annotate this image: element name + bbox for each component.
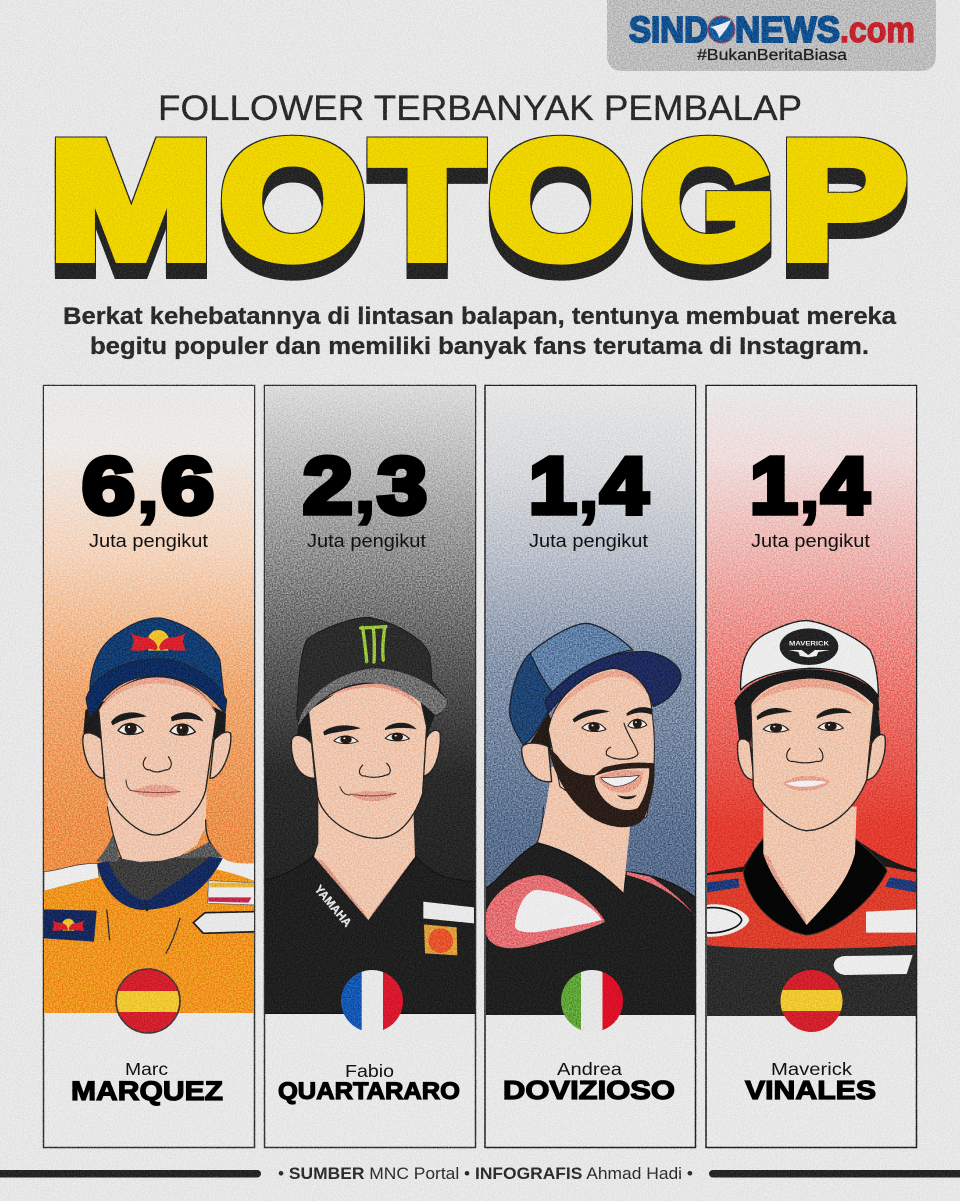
rider name: MARQUEZ <box>71 1076 223 1106</box>
portrait: Marc Marquez <box>44 618 257 1013</box>
flag: Spain <box>116 969 180 1033</box>
follower count: 2,3 <box>303 441 427 530</box>
gradient backdrop <box>707 386 916 1016</box>
portrait: Maverick Vinales: MAVERICK <box>789 641 829 648</box>
rider name <box>503 1059 675 1105</box>
rider name: DOVIZIOSO <box>503 1077 675 1105</box>
title: MOTOGP: P <box>781 108 906 293</box>
follower count: 6,6 <box>82 441 214 530</box>
footer rule right <box>709 1170 960 1178</box>
subtitle heading: FOLLOWER TERBANYAK PEMBALAP <box>158 88 802 128</box>
footer credits: • SUMBER MNC Portal • INFOGRAFIS Ahmad Hadi • <box>278 1165 693 1183</box>
panel: Maverick Vinales <box>706 386 917 1148</box>
portrait: Fabio Quartararo: YAMAHA <box>312 882 355 930</box>
title: MOTOGP: O <box>489 108 633 293</box>
intro paragraph: Berkat kehebatannya di lintasan balapan, tentunya membuat mereka <box>63 303 897 330</box>
rider name: VINALES <box>745 1075 876 1105</box>
portrait: Fabio Quartararo <box>264 617 477 1013</box>
rider name: Maverick <box>771 1059 852 1079</box>
logo tagline: #BukanBeritaBiasa <box>697 47 847 64</box>
logo wordmark: NEWS <box>735 9 840 50</box>
card background <box>706 386 916 1148</box>
logo wordmark <box>629 9 915 50</box>
logo wordmark: SIND <box>629 9 708 50</box>
gradient backdrop <box>265 386 475 1014</box>
panel: Marc Marquez <box>44 386 257 1148</box>
flag: France <box>341 970 404 1032</box>
logo background <box>607 0 936 71</box>
rider name: Andrea <box>557 1059 622 1079</box>
rider name: Fabio <box>345 1061 394 1081</box>
panel: Andrea Dovizioso <box>485 386 697 1148</box>
title: MOTOGP: G <box>642 108 775 292</box>
follower count: 1,4 <box>529 441 649 530</box>
footer rule left <box>0 1170 261 1178</box>
rider name: QUARTARARO <box>278 1078 460 1105</box>
follower unit: Juta pengikut <box>529 530 648 551</box>
intro paragraph: begitu populer dan memiliki banyak fans terutama di Instagram. <box>90 333 869 360</box>
card background <box>264 386 476 1148</box>
title: MOTOGP: M <box>50 109 212 293</box>
title: MOTOGP <box>50 107 906 293</box>
intro paragraph <box>63 303 897 360</box>
rider name <box>745 1059 876 1105</box>
follower count: 1,4 <box>750 441 870 530</box>
logo wordmark: .com <box>840 9 915 50</box>
logo: SINDONEWS.com <box>607 0 936 71</box>
follower unit: Juta pengikut <box>89 530 208 551</box>
portrait: Andrea Dovizioso <box>485 623 697 1017</box>
rider name <box>71 1059 223 1106</box>
flag: Italy <box>561 970 624 1032</box>
rider name <box>278 1061 460 1105</box>
flag: Spain <box>780 970 844 1032</box>
title: MOTOGP: T <box>372 107 482 292</box>
gradient backdrop <box>486 386 695 1015</box>
card background <box>44 386 254 1148</box>
rider name: Marc <box>125 1059 168 1079</box>
title: MOTOGP: O <box>221 108 365 293</box>
panel: Fabio Quartararo <box>264 386 477 1148</box>
follower unit: Juta pengikut <box>751 530 870 551</box>
card background <box>485 386 696 1148</box>
follower unit: Juta pengikut <box>307 530 426 551</box>
gradient backdrop <box>44 386 254 1013</box>
portrait: Maverick Vinales <box>706 621 917 1017</box>
